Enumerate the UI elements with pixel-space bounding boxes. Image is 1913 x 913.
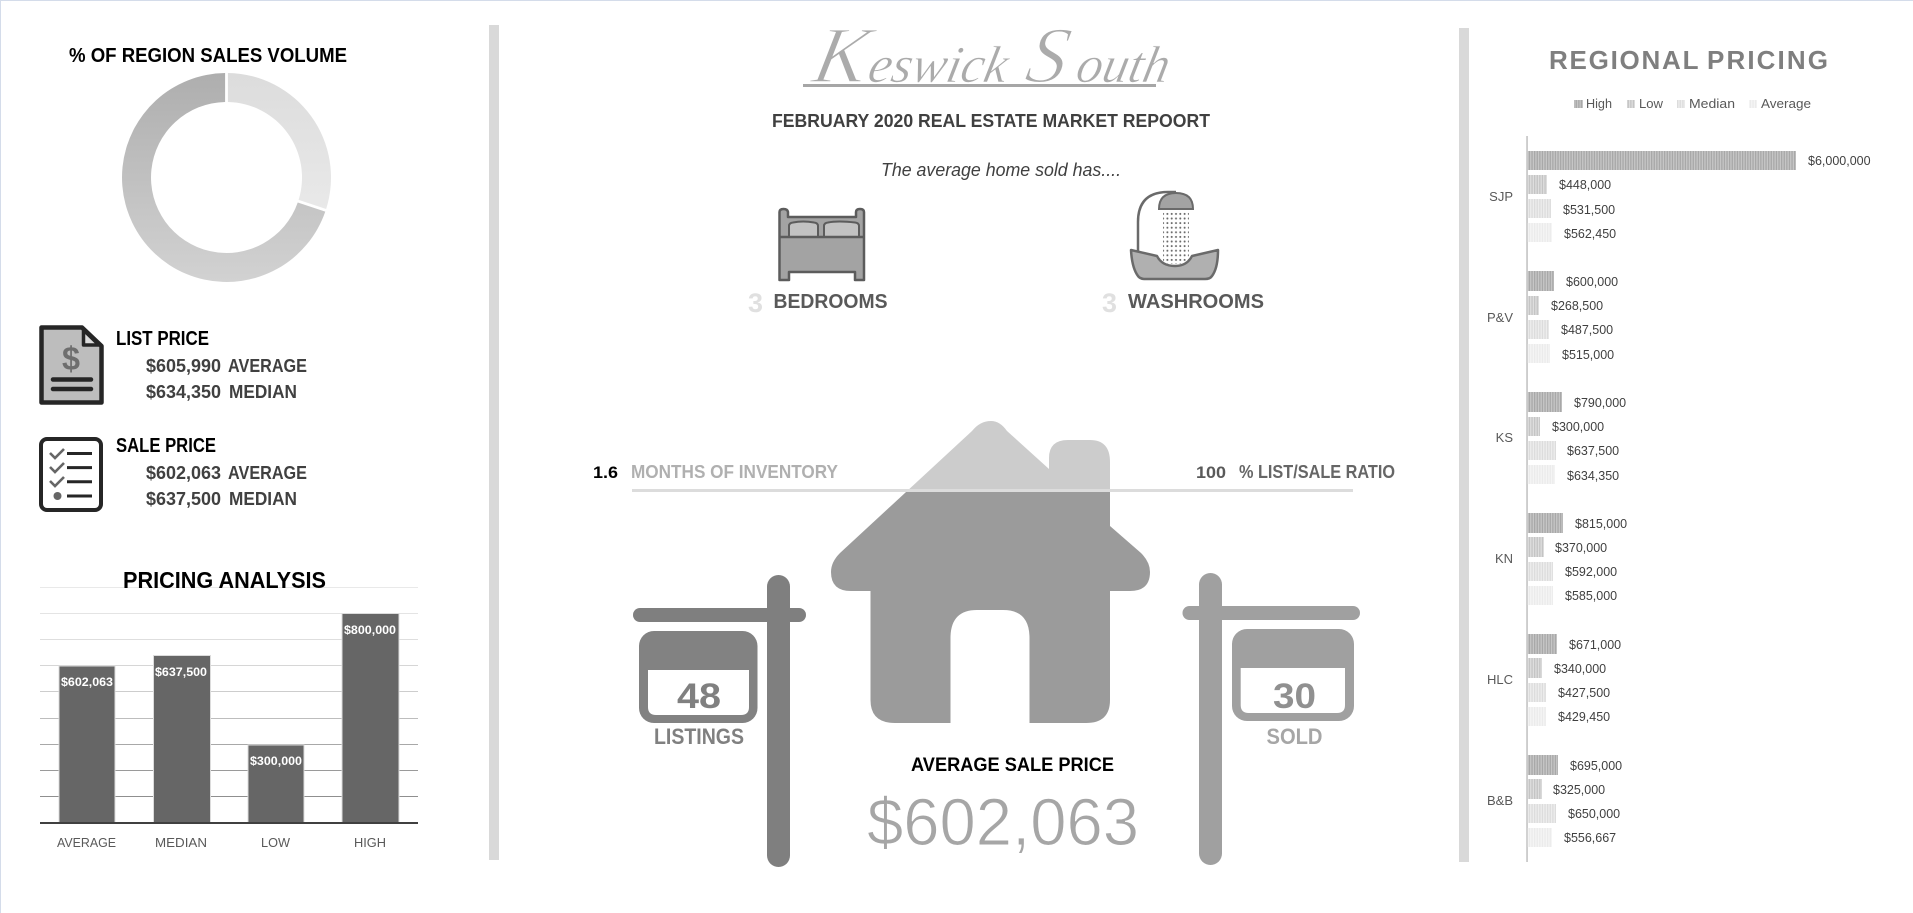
sale price block: AVERAGE xyxy=(228,462,307,483)
group: B&B: $650,000 xyxy=(1568,807,1620,821)
icon: shower over tub xyxy=(1131,192,1218,279)
group: P&V: $268,500 xyxy=(1551,299,1603,313)
sign: listings xyxy=(633,575,806,867)
bar: high xyxy=(342,614,399,823)
sale price block: MEDIAN xyxy=(229,488,297,509)
group: B&B: $325,000 xyxy=(1553,783,1605,797)
icon: price document xyxy=(42,328,102,402)
group: B&B xyxy=(1487,755,1622,847)
group: P&V: P&V xyxy=(1487,310,1513,325)
icon: price document: $ xyxy=(62,340,80,377)
group: HLC: $340,000 xyxy=(1554,662,1606,676)
bar: high: $800,000 xyxy=(344,623,396,637)
group: KS: $637,500 xyxy=(1567,444,1619,458)
group: KS: $790,000 xyxy=(1574,396,1626,410)
group: P&V: $515,000 xyxy=(1562,348,1614,362)
group: SJP: $562,450 xyxy=(1564,227,1616,241)
x axis labels: HIGH xyxy=(354,835,386,850)
group: P&V xyxy=(1487,271,1618,363)
group: P&V: $600,000 xyxy=(1566,275,1618,289)
group: HLC: HLC xyxy=(1487,672,1513,687)
list price block xyxy=(116,328,307,402)
sale price block: SALE PRICE xyxy=(116,435,216,457)
bar: low xyxy=(248,745,304,823)
bar: low: $300,000 xyxy=(250,754,302,768)
bar: average xyxy=(59,666,115,823)
panel: regional pricing xyxy=(1487,45,1871,862)
icon: bed xyxy=(780,209,864,280)
heading: regional pricing: REGIONAL xyxy=(1549,45,1699,75)
group: SJP: $448,000 xyxy=(1559,178,1611,192)
washrooms label: 3 xyxy=(1102,288,1117,318)
sale price block: $637,500 xyxy=(146,488,221,509)
x axis labels: LOW xyxy=(261,835,291,850)
title: Keswick South: K xyxy=(805,12,882,100)
list price block: $634,350 xyxy=(146,381,221,402)
sold count: 30 xyxy=(1273,677,1316,716)
x axis labels: AVERAGE xyxy=(57,835,116,850)
sold label: SOLD xyxy=(1266,724,1322,749)
sale price block: $602,063 xyxy=(146,462,221,483)
months of inventory stat: 1.6 xyxy=(593,463,618,482)
washrooms label: WASHROOMS xyxy=(1128,291,1264,313)
x axis labels: MEDIAN xyxy=(155,835,207,850)
legend xyxy=(1574,96,1811,111)
bar: median: $637,500 xyxy=(155,665,207,679)
heading: regional pricing: PRICING xyxy=(1707,45,1828,75)
icon: house xyxy=(831,421,1150,723)
group: KN: $815,000 xyxy=(1575,517,1627,531)
months of inventory stat: MONTHS OF INVENTORY xyxy=(631,462,838,482)
heading: percent of region sales volume: % OF REGION SALES VOLUME xyxy=(69,45,347,67)
group: KS: $634,350 xyxy=(1567,469,1619,483)
group: B&B: $556,667 xyxy=(1564,831,1616,845)
legend: Median xyxy=(1689,96,1735,111)
group: KS: $300,000 xyxy=(1552,420,1604,434)
group: KN xyxy=(1495,513,1627,605)
group: SJP xyxy=(1489,151,1871,242)
legend: High xyxy=(1586,96,1612,111)
group: KN: $370,000 xyxy=(1555,541,1607,555)
group: B&B: $695,000 xyxy=(1570,759,1622,773)
x axis labels xyxy=(57,835,386,850)
listings count: 48 xyxy=(677,677,721,716)
title: Keswick South: S xyxy=(1019,12,1078,100)
group: KS: KS xyxy=(1496,430,1513,445)
group: SJP: $6,000,000 xyxy=(1808,154,1871,168)
group: SJP: SJP xyxy=(1489,189,1513,204)
panel: centre column xyxy=(593,12,1395,867)
list price block: MEDIAN xyxy=(229,381,297,402)
group: HLC: $427,500 xyxy=(1558,686,1610,700)
subtitle: FEBRUARY 2020 REAL ESTATE MARKET REPOORT xyxy=(772,110,1211,131)
listings label: LISTINGS xyxy=(654,724,744,749)
group: KN: KN xyxy=(1495,551,1513,566)
washrooms label xyxy=(1102,288,1264,318)
bar chart: pricing analysis xyxy=(40,567,418,850)
icon: checklist xyxy=(41,439,101,510)
title: Keswick South: eswick xyxy=(863,37,1016,94)
panel: left column xyxy=(40,45,418,850)
list price block: $605,990 xyxy=(146,355,221,376)
group: P&V: $487,500 xyxy=(1561,323,1613,337)
list price block: AVERAGE xyxy=(228,355,307,376)
chart title: PRICING ANALYSIS xyxy=(123,567,326,593)
group: SJP: $531,500 xyxy=(1563,203,1615,217)
bar: average: $602,063 xyxy=(61,675,113,689)
title: Keswick South: outh xyxy=(1071,37,1176,94)
intro line: The average home sold has.... xyxy=(881,160,1121,180)
group: KN: $592,000 xyxy=(1565,565,1617,579)
group: HLC: $429,450 xyxy=(1558,710,1610,724)
legend: Low xyxy=(1639,96,1664,111)
sale price block xyxy=(116,435,307,509)
bar: median xyxy=(154,656,210,823)
average sale price heading: AVERAGE SALE PRICE xyxy=(911,755,1114,776)
sign: sold xyxy=(1182,573,1360,865)
list sale ratio stat: % LIST/SALE RATIO xyxy=(1239,462,1395,482)
bedrooms label: BEDROOMS xyxy=(774,291,888,313)
group: B&B: B&B xyxy=(1487,793,1513,808)
bedrooms label xyxy=(748,288,888,318)
list sale ratio stat: 100 xyxy=(1196,463,1226,482)
group: KS xyxy=(1496,392,1626,484)
group: KN: $585,000 xyxy=(1565,589,1617,603)
list price block: LIST PRICE xyxy=(116,328,209,350)
average sale price value: $602,063 xyxy=(867,785,1139,860)
title: Keswick South xyxy=(803,12,1181,100)
group: HLC xyxy=(1487,634,1621,726)
group: HLC: $671,000 xyxy=(1569,638,1621,652)
bedrooms label: 3 xyxy=(748,288,763,318)
donut chart xyxy=(122,73,331,282)
legend: Average xyxy=(1761,96,1811,111)
